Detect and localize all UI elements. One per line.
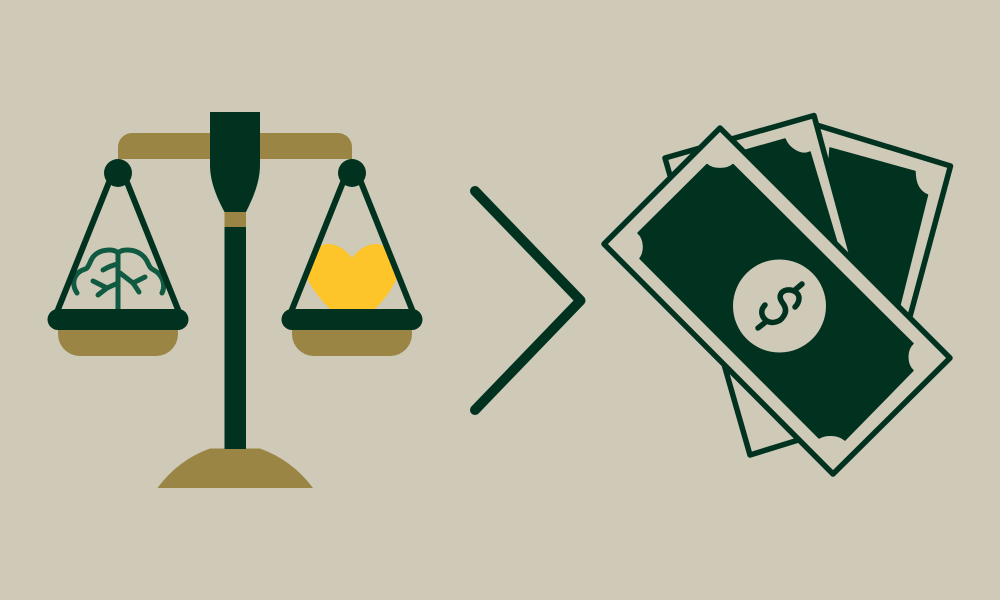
arrow: greater-than sign [475, 191, 580, 410]
left pan dish [58, 330, 178, 356]
right pan chains [291, 176, 413, 312]
back left note print [700, 139, 860, 340]
front note print [638, 164, 913, 440]
back right banknote [770, 123, 950, 335]
dollar sign [758, 284, 802, 328]
icon: heart [307, 244, 397, 309]
left pan chains [57, 176, 179, 312]
back left note outline [665, 116, 864, 455]
icon: balance scale [48, 112, 422, 488]
scale post [224, 227, 246, 449]
right pivot [338, 159, 366, 187]
right pan: heart [282, 159, 422, 356]
left pan bar [48, 309, 188, 330]
right pan dish [292, 330, 412, 356]
dollar coin [733, 260, 826, 352]
front note outline [604, 128, 950, 474]
back right note outline [770, 123, 950, 335]
post collar [224, 212, 246, 227]
right pan bar [282, 309, 422, 330]
back left banknote [665, 116, 864, 455]
icon: banknotes [604, 116, 950, 474]
post head [210, 112, 260, 212]
scale beam [118, 133, 352, 159]
left pivot [104, 159, 132, 187]
left pan: brain [48, 159, 188, 356]
back right note print [820, 148, 928, 305]
scale base [158, 448, 313, 488]
front banknote [604, 128, 950, 474]
icon: brain [74, 250, 164, 309]
